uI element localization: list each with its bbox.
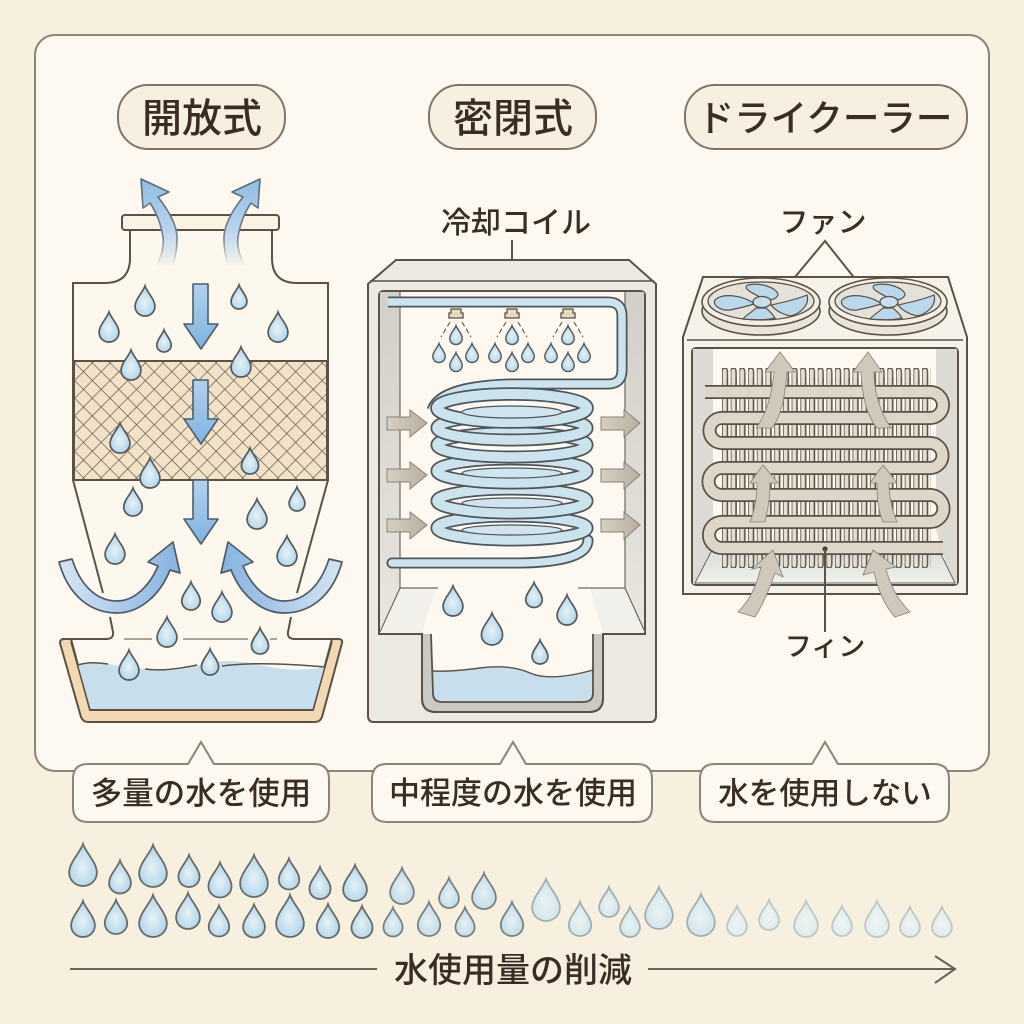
airflow arrows in xyxy=(387,410,427,539)
water droplets xyxy=(99,285,305,680)
callout: no water use xyxy=(700,742,949,822)
falling water arrows xyxy=(184,284,218,544)
falling droplets xyxy=(443,582,577,664)
diagram: dry cooler xyxy=(683,277,967,617)
housing xyxy=(683,277,967,594)
fin array xyxy=(722,368,931,568)
spray nozzles xyxy=(449,309,575,318)
airflow arrows out xyxy=(601,410,640,539)
housing xyxy=(368,260,656,722)
serpentine tube xyxy=(705,392,944,548)
label: fins xyxy=(785,546,865,662)
callout: moderate water use: 中程度の水を使用 xyxy=(389,776,637,811)
collecting tray xyxy=(422,634,603,712)
tower body fill xyxy=(73,230,328,640)
fan left xyxy=(702,278,820,335)
diagram: closed cooling tower xyxy=(368,260,656,722)
intake air arrows xyxy=(59,542,342,613)
heading: open type: 開放式 xyxy=(142,97,262,141)
exhaust arrows xyxy=(141,179,260,265)
rim centre line xyxy=(124,638,277,640)
heading: open type xyxy=(118,85,285,149)
callout: moderate water use xyxy=(372,742,652,822)
spray header and coil feed pipe xyxy=(388,302,622,410)
floor xyxy=(695,548,955,583)
hopper panels xyxy=(381,588,644,633)
right side shading xyxy=(625,292,644,632)
heading: dry cooler xyxy=(685,85,967,149)
left side shading xyxy=(380,292,400,632)
tower top cap xyxy=(122,215,279,230)
tower outline xyxy=(62,230,340,639)
heading: closed type xyxy=(429,85,596,149)
arrow and caption: water reduction xyxy=(70,952,955,990)
label: fins: フィン xyxy=(785,632,865,662)
interior chamber xyxy=(379,291,645,712)
panel: main card xyxy=(35,35,989,771)
arrow and caption: water reduction: 水使用量の削減 xyxy=(394,952,632,990)
interior xyxy=(692,348,958,585)
cooling coil loops xyxy=(437,394,587,540)
diagram: open cooling tower xyxy=(59,179,342,722)
fan right xyxy=(829,278,947,335)
label: fan xyxy=(779,207,867,285)
fill media mesh xyxy=(74,361,327,480)
bottom outlet pipe xyxy=(392,540,588,563)
callout: heavy water use: 多量の水を使用 xyxy=(91,775,311,811)
droplet row: decreasing water use xyxy=(69,844,952,938)
label: cooling coil: 冷却コイル xyxy=(441,207,591,240)
airflow arrows upward xyxy=(738,352,910,617)
basin xyxy=(60,639,342,722)
spray dashes xyxy=(441,322,583,337)
callout: heavy water use xyxy=(73,742,329,822)
spray droplets xyxy=(433,326,590,372)
heading: dry cooler: ドライクーラー xyxy=(698,98,952,139)
interior side shading xyxy=(693,349,957,584)
heading: closed type: 密閉式 xyxy=(453,97,573,141)
callout: no water use: 水を使用しない xyxy=(718,777,932,811)
label: fan: ファン xyxy=(779,207,867,239)
